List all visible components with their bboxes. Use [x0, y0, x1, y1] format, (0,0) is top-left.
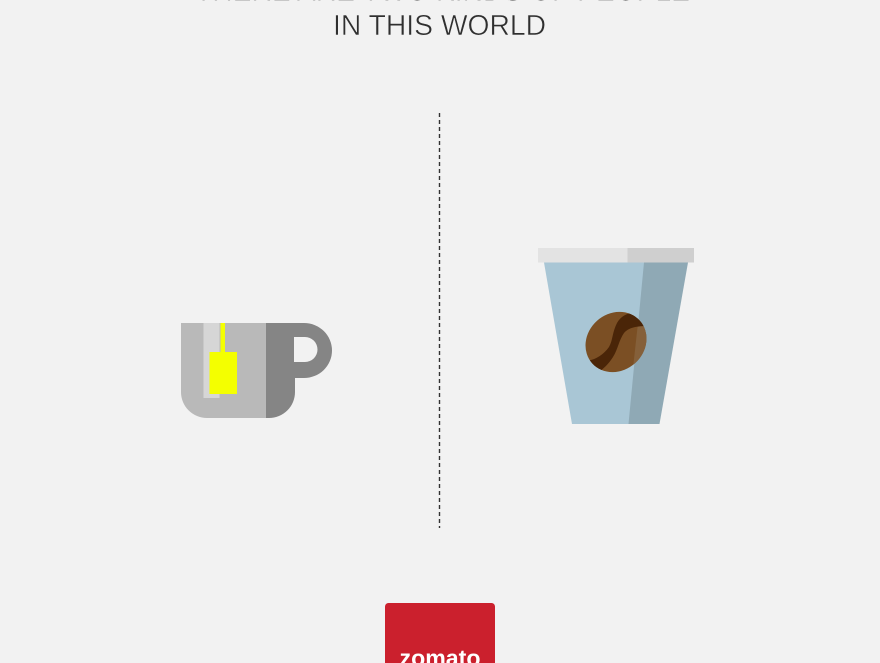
icon: tea mug [181, 323, 332, 418]
center dashed divider [438, 113, 440, 528]
tea bag shadow strip [204, 323, 220, 398]
icon: takeaway coffee cup [538, 248, 694, 424]
cup lid [538, 248, 628, 262]
mug handle and dark side [266, 323, 332, 418]
title: IN THIS WORLD [333, 10, 546, 42]
cup body [544, 262, 644, 424]
tea bag tag [210, 352, 237, 394]
title [195, 0, 690, 42]
icon: coffee bean [586, 312, 646, 372]
logo: zomato [385, 603, 495, 663]
mug body light side [181, 323, 266, 418]
tea bag string [220, 323, 225, 353]
